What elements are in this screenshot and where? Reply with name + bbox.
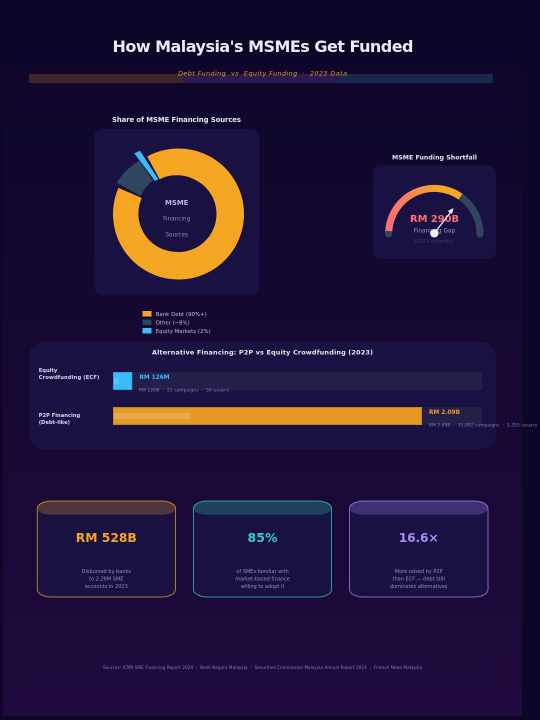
footer sources: Sources: ICMR SME Financing Report 2024 · Bank Negara Malaysia · Securities Commission Malaysia Annual Report 2024 · Fintech News Malaysia: [103, 665, 423, 670]
slice: equity markets: [134, 151, 158, 181]
stat value: 16.6×: [399, 531, 439, 545]
stat description: [235, 569, 290, 590]
gauge fill: [389, 188, 460, 231]
subtitle: Debt Funding vs Equity Funding · 2023 Data: [178, 70, 347, 78]
legend: Other (~8%): [156, 320, 190, 326]
detail: ECF: RM 126M · 51 campaigns · 50 issuers: [139, 388, 229, 392]
panel heading: Alternative Financing: P2P vs Equity Crowdfunding (2023): [152, 348, 373, 356]
stat value: RM 528B: [76, 531, 137, 545]
donut centre label: MSME: [165, 199, 189, 207]
panel: alternative financing: [29, 342, 537, 449]
row label: P2P: [39, 413, 80, 426]
detail: P2P: RM 2.09B · 31,002 campaigns · 5,355 issuers: [429, 422, 537, 427]
stat description: [82, 569, 131, 590]
card: market-based finance: [194, 501, 332, 597]
donut centre label: Sources: [165, 232, 188, 238]
legend: [142, 311, 211, 335]
panel: donut chart: [94, 129, 260, 295]
stat description: of SMEs familiar with: [236, 569, 289, 575]
tri-colour header band: [29, 74, 493, 83]
stat description: Disbursed by banks: [82, 569, 131, 575]
donut hub: [138, 175, 215, 252]
bar track: ECF: [113, 372, 482, 390]
bar: ECF: [113, 372, 132, 390]
stat description: accounts in 2023: [85, 584, 128, 590]
card: bank disbursement: [37, 501, 175, 597]
row label: ECF: Crowdfunding (ECF): [39, 375, 99, 381]
title: How Malaysia's MSMEs Get Funded: [112, 37, 414, 56]
stat description: to 2.28M SME: [89, 576, 123, 582]
legend: Bank Debt (90%+): [156, 312, 207, 318]
value: ECF: RM 126M: [140, 375, 170, 381]
value: P2P: RM 2.09B: [429, 410, 461, 416]
slice: other: [117, 161, 153, 196]
legend: Equity Markets (2%): [156, 329, 211, 335]
panel: gauge: [373, 166, 496, 259]
donut centre label: [163, 199, 191, 238]
gauge value: RM 290B: [410, 214, 459, 225]
row label: P2P: P2P Financing: [39, 413, 80, 419]
heading: funding shortfall: MSME Funding Shortfall: [392, 154, 477, 162]
bar track: P2P: [113, 407, 482, 425]
row label: P2P: (Debt-like): [39, 420, 70, 426]
gauge needle: [430, 208, 454, 238]
gauge caption: Financing Gap: [414, 228, 456, 234]
stat description: willing to adopt it: [241, 584, 284, 590]
stat value: 85%: [248, 531, 278, 545]
stat description: [390, 569, 448, 590]
donut centre label: Financing: [163, 216, 191, 222]
stat description: market-based finance: [235, 576, 290, 582]
stat description: than ECF — debt still: [393, 576, 445, 582]
row label: ECF: Equity: [39, 368, 58, 374]
bar: P2P: [113, 407, 422, 425]
heading: financing sources: Share of MSME Financing Sources: [112, 116, 241, 124]
gauge track: [389, 188, 480, 234]
row label: ECF: [39, 368, 99, 381]
stat description: dominates alternatives: [390, 584, 448, 590]
card: P2P multiple: [350, 501, 488, 597]
stat description: More raised by P2P: [395, 569, 443, 575]
gauge note: (2022 estimate): [415, 238, 454, 244]
slice: bank debt: [113, 149, 244, 280]
